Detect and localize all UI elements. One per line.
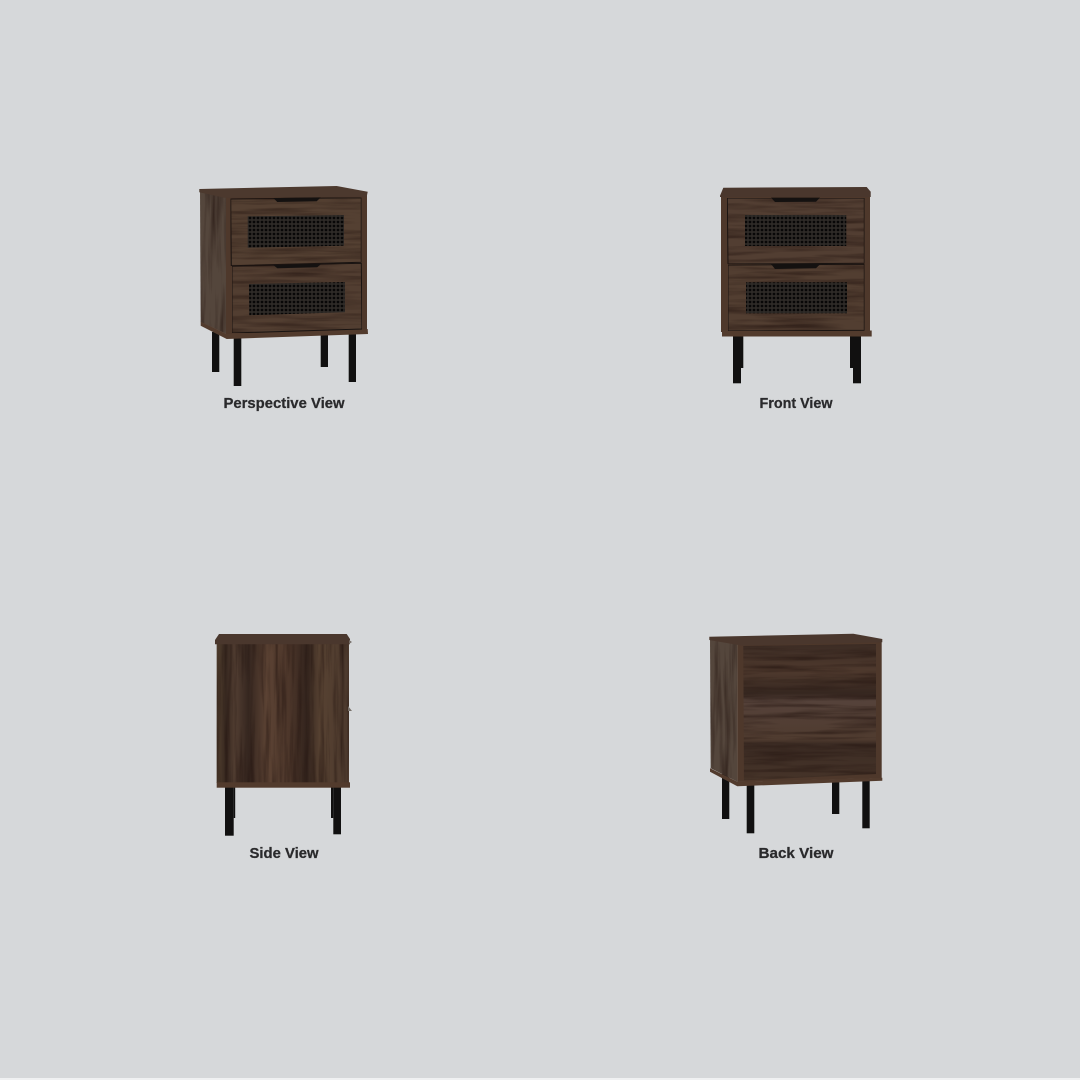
- caption: Perspective View: [224, 396, 345, 412]
- top board: [199, 186, 368, 198]
- caption: Back View: [758, 846, 834, 862]
- side panel: [200, 190, 226, 334]
- upper handle: [273, 197, 321, 202]
- top board: [215, 634, 350, 644]
- front frame: [226, 195, 367, 335]
- legs: [722, 772, 870, 833]
- upper handle: [771, 198, 820, 202]
- legs: [212, 332, 356, 386]
- body frame: [721, 196, 870, 332]
- lower cane panel: [746, 282, 847, 313]
- caption: Side View: [250, 846, 319, 862]
- lower handle: [273, 264, 321, 268]
- bottom board: [710, 768, 882, 786]
- bottom board: [722, 330, 872, 336]
- lower drawer: [232, 263, 362, 333]
- panel: side view: [215, 634, 352, 862]
- top board: [720, 187, 871, 197]
- side panel: [710, 638, 737, 782]
- back frame: [737, 641, 882, 782]
- caption: Front View: [760, 396, 833, 412]
- bottom edge strip: [0, 1078, 1080, 1080]
- upper cane panel: [248, 215, 344, 248]
- lower drawer: [728, 264, 864, 331]
- upper drawer: [727, 198, 864, 264]
- panel: back view: [709, 634, 882, 862]
- back panel: [743, 644, 876, 780]
- panel: perspective view: [199, 186, 368, 412]
- legs: [225, 786, 341, 836]
- side panel: [217, 644, 349, 783]
- panel: front view: [720, 187, 872, 412]
- lower handle: [771, 264, 820, 269]
- upper drawer: [231, 198, 361, 266]
- bottom board: [217, 782, 350, 788]
- bottom board: [201, 322, 368, 339]
- lower cane panel: [249, 282, 345, 315]
- handle slivers: [348, 640, 352, 711]
- top board: [709, 634, 882, 646]
- upper cane panel: [745, 215, 846, 246]
- legs: [733, 334, 861, 383]
